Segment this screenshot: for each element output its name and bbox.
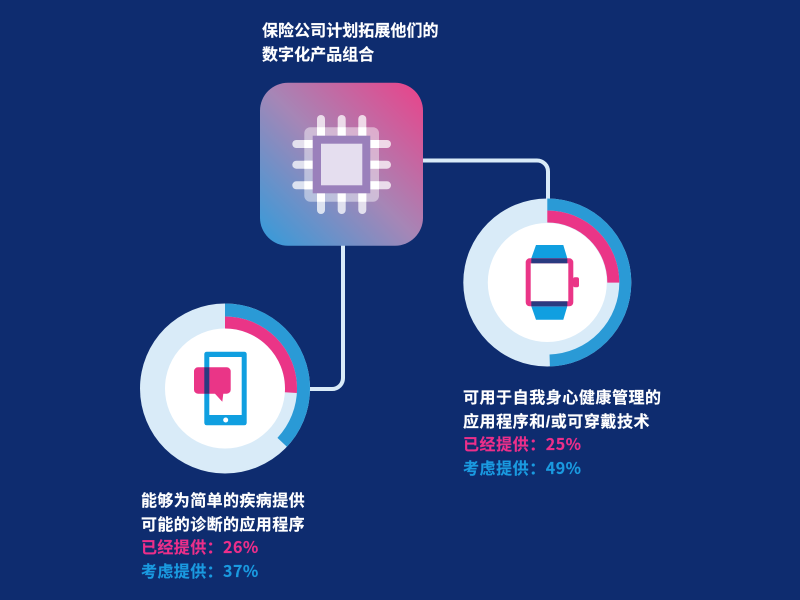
text block: left donut caption: 能够为简单的疾病提供 <box>141 493 305 510</box>
icon: phone with speech bubble <box>194 352 247 425</box>
icon: processor chip panel <box>260 83 423 246</box>
connector: chip to right donut <box>418 160 548 205</box>
donut chart: left, 26% offered and 37% considering <box>140 304 310 474</box>
connector: chip to left donut <box>305 240 343 389</box>
text block: right donut caption <box>463 389 662 479</box>
text block: left donut caption <box>141 492 305 582</box>
text block: right donut caption: 应用程序和/或可穿戴技术 <box>463 414 650 431</box>
chip core <box>321 144 362 185</box>
icon: smartwatch <box>526 245 579 320</box>
text block: right donut caption: 已经提供：25% <box>463 431 582 455</box>
text block: right donut caption: 考虑提供：49% <box>463 455 582 479</box>
text block: left donut caption: 考虑提供：37% <box>141 558 259 582</box>
chip pins <box>292 115 391 214</box>
title <box>262 22 439 64</box>
chip frame <box>313 136 370 193</box>
donut chart: right, 25% offered and 49% considering <box>463 198 631 366</box>
chip pin highlights <box>304 127 379 202</box>
text block: left donut caption: 可能的诊断的应用程序 <box>141 517 305 534</box>
title: 保险公司计划拓展他们的 <box>262 23 439 40</box>
chip body <box>304 127 379 202</box>
text block: left donut caption: 已经提供：26% <box>141 534 259 558</box>
text block: right donut caption: 可用于自我身心健康管理的 <box>463 390 662 407</box>
title: 数字化产品组合 <box>262 47 374 64</box>
